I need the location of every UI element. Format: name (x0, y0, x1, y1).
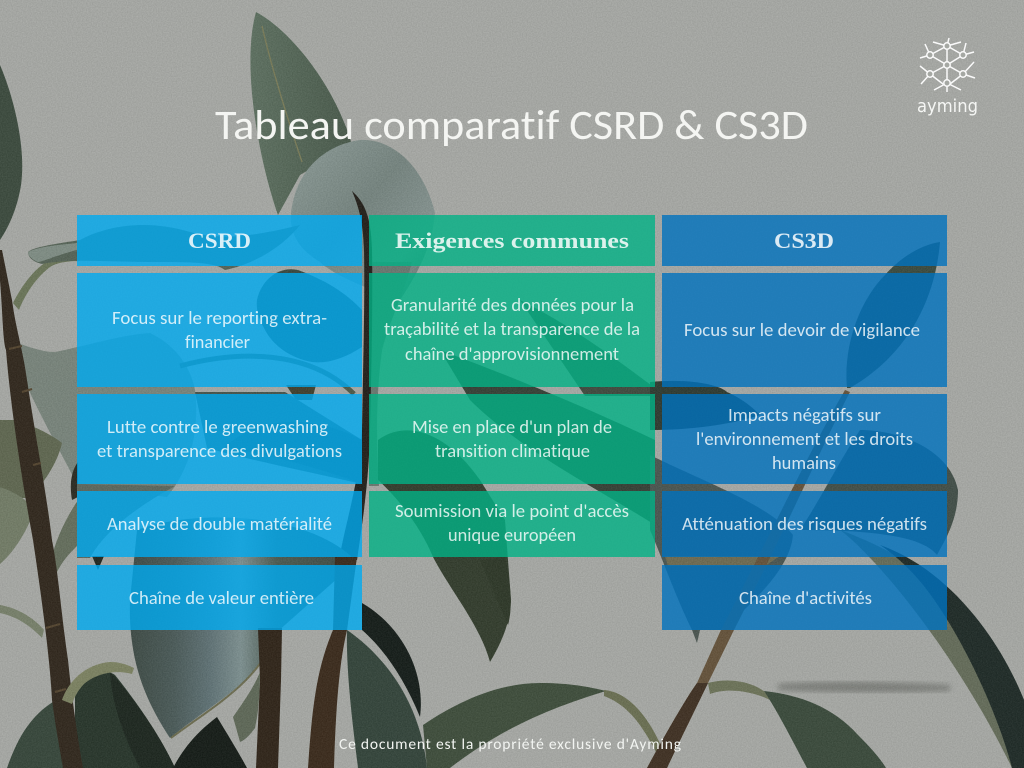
cell: transition plan: Mise en place d'un plan de (412, 416, 612, 438)
cell: chain of activities: Chaîne d'activités (739, 587, 872, 609)
panel: common requirements column (369, 215, 655, 557)
wall shadow (778, 682, 950, 692)
pale round leaf (291, 140, 435, 300)
cell: negative impacts (662, 394, 947, 484)
cell: value chain: Chaîne de valeur entière (129, 587, 314, 609)
cell: single access point: unique européen (448, 524, 576, 546)
dark leaf row two (195, 392, 362, 484)
cell: value chain (77, 565, 362, 630)
panel: CS3D column (662, 215, 947, 630)
big leaf behind CS3D (650, 455, 793, 643)
right petiole and leaf (708, 680, 770, 700)
stems bottom centre (256, 628, 282, 768)
cell: single access point (369, 491, 655, 557)
footer note: Ce document est la propriété exclusive d'Ayming (339, 735, 682, 754)
leaves behind common column (440, 350, 655, 525)
cell: negative impacts: l'environnement et les droits (696, 428, 913, 450)
cell: greenwashing (77, 394, 362, 484)
cell: reporting: financier (185, 331, 250, 353)
cell: risk mitigation (662, 491, 947, 557)
bottom-left leaves (7, 700, 90, 768)
icon: network sphere (920, 38, 975, 92)
dark lower leaf (362, 603, 421, 717)
cell: greenwashing: Lutte contre le greenwashing (107, 416, 329, 438)
cell: greenwashing: et transparence des divulgations (97, 440, 342, 462)
cell: data granularity: traçabilité et la transparence de la (384, 318, 640, 340)
cell: negative impacts: humains (772, 452, 836, 474)
left petiole (0, 605, 44, 638)
upper left branch (13, 256, 80, 310)
panel: CSRD column (77, 215, 362, 630)
cell: duty of vigilance: Focus sur le devoir de vigilance (684, 319, 920, 341)
leaf shade inside common column (369, 262, 412, 486)
heading: Exigences communes: Exigences communes (395, 228, 629, 253)
left pale leaf (8, 333, 196, 497)
logo: ayming (917, 38, 978, 117)
cell: data granularity (369, 273, 655, 387)
cell: data granularity: Granularité des données pour la (391, 294, 634, 316)
right big leaf (840, 530, 1024, 768)
cell: duty of vigilance (662, 273, 947, 387)
heading: CSRD: CSRD (188, 228, 251, 253)
cell: chain of activities (662, 565, 947, 630)
heading: CS3D: CS3D (774, 228, 834, 253)
left olive leaves (0, 420, 62, 498)
dark round leaf behind CSRD (257, 269, 362, 362)
right stem (647, 390, 850, 768)
bottom-left petiole (62, 662, 134, 704)
central stem (339, 191, 372, 560)
cell: reporting: Focus sur le reporting extra- (112, 307, 327, 329)
upper left leaf (28, 225, 300, 270)
dark band left of CS3D (650, 381, 760, 430)
big central bottom leaf (130, 517, 352, 738)
cell: single access point: Soumission via le point d'accès (395, 500, 629, 522)
left stem (0, 250, 83, 768)
left edge leaf (0, 65, 22, 240)
cell: data granularity: chaîne d'approvisionnement (405, 343, 619, 365)
cell: transition plan (369, 394, 655, 484)
bottom centre leaf (423, 683, 606, 768)
top leaf (250, 12, 352, 215)
curved petiole (180, 356, 354, 394)
upper right leaf (846, 242, 940, 388)
cell: double materiality: Analyse de double matérialité (107, 513, 332, 535)
heading: CS3D (662, 215, 947, 266)
cell: reporting (77, 273, 362, 387)
heading: Exigences communes (369, 215, 655, 266)
cell: risk mitigation: Atténuation des risques négatifs (682, 513, 927, 535)
cell: negative impacts: Impacts négatifs sur (728, 404, 881, 426)
heading: CSRD (77, 215, 362, 266)
cell: transition plan: transition climatique (435, 440, 590, 462)
logo wordmark: ayming (917, 96, 978, 117)
title: Tableau comparatif CSRD & CS3D (215, 100, 808, 151)
cell: double materiality (77, 491, 362, 557)
leaf with tip behind CS3D (800, 430, 958, 555)
